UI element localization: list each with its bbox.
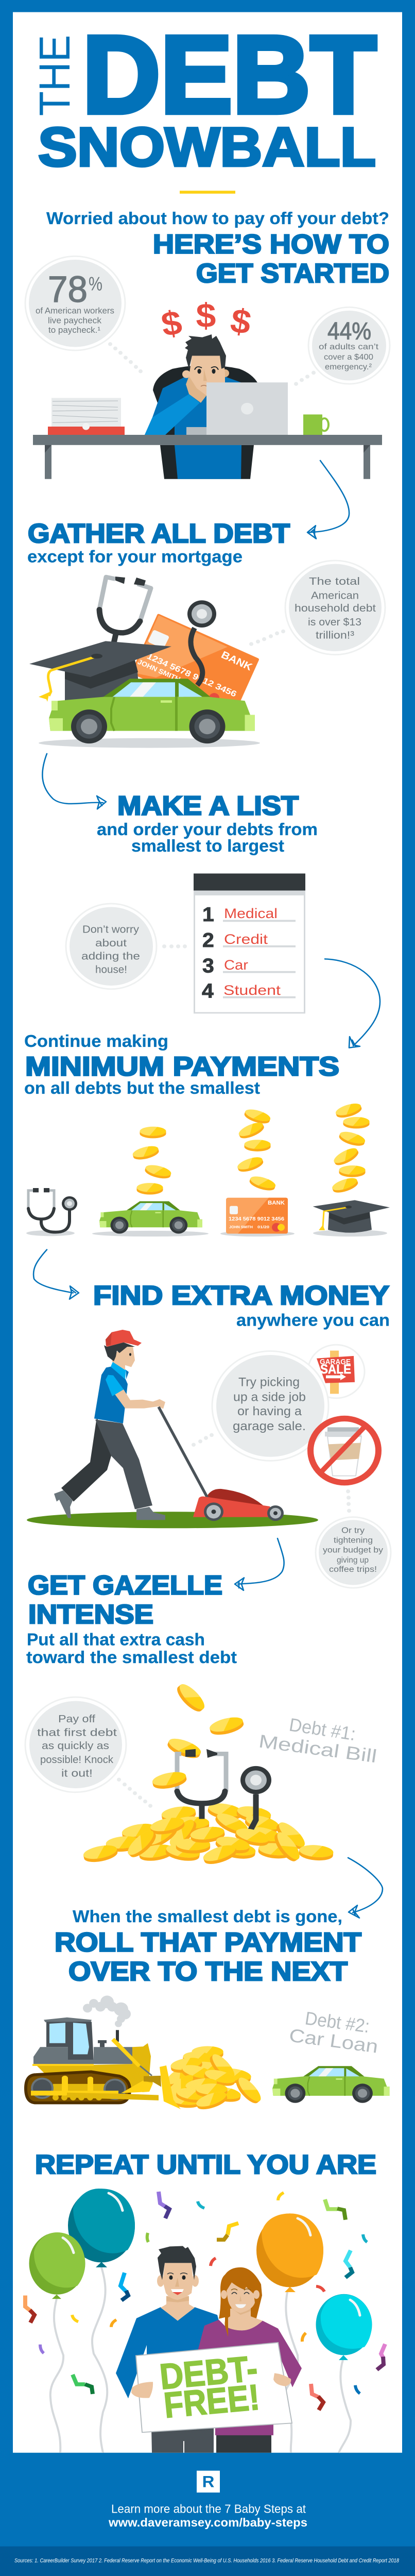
callout: first debt: as quickly as [42,1739,109,1752]
notepad: debt list: Student [223,982,281,998]
callout: 78%: to paycheck.¹ [48,325,100,335]
intro heading [46,209,389,289]
arrow: to roll that payment [348,1858,383,1918]
callout: 44%: of adults can’t [319,343,378,351]
footer: call to action: www.daveramsey.com/baby-steps [108,2516,307,2530]
footer: logo: R [202,2472,214,2490]
callout: coffee trips: your budget by [323,1546,384,1554]
dotted connector: coffee [346,1489,351,1513]
balloon: orange [256,2213,323,2292]
heading: minimum payments: MINIMUM PAYMENTS [25,1052,339,1081]
intro heading: GET STARTED [196,259,389,289]
callout: household debt: The total [309,575,360,587]
callout: household debt: trillion!³ [316,629,354,641]
heading: find extra money: FIND EXTRA MONEY [93,1281,389,1311]
dotted connector: 44% [294,371,316,386]
callout: house: Don’t worry [82,923,139,935]
falling coins: minimum payments [131,1100,372,1195]
heading: minimum payments: Continue making [24,1032,168,1051]
illustration: debt pile (stethoscope, card, cap, car): 1234 5678 9012 3456 [145,652,238,699]
callout: 44%: cover a $400 [324,352,373,362]
callout: first debt: it out! [61,1767,93,1779]
callout: side job [212,1351,328,1461]
heading: gather all debt: except for your mortgage [27,548,243,567]
dotted connector: house [162,944,187,948]
notepad: debt list: 1 [202,904,214,926]
balloon strings [50,2267,351,2453]
heading: gather all debt: GATHER ALL DEBT [28,519,290,549]
title: The Debt Snowball [31,13,376,178]
icon: small credit card: 01/20 [257,1225,269,1229]
icon: small stethoscope [26,1188,77,1236]
callout: coffee trips: Or try [341,1526,365,1535]
dotted connector: first debt [117,1777,152,1808]
notepad: debt list: Car [224,957,248,973]
handwritten label: debt 1: Debt #1: [288,1714,357,1744]
heading: get gazelle intense: Put all that extra cash [27,1630,205,1649]
callout: household debt: American [311,589,359,601]
notepad: debt list: 4 [202,980,214,1002]
icon: small credit card: JOHN SMITH [229,1225,253,1229]
intro heading: HERE’S HOW TO [153,230,389,259]
heading: get gazelle intense: GET GAZELLE [28,1571,222,1600]
footer: logo [197,2471,220,2493]
sign: debt-free: DEBT- [158,2348,260,2397]
illustration: debt-free couple [116,2246,302,2453]
icon: small credit card: BANK [268,1199,285,1206]
arrow: to get gazelle intense [235,1538,284,1590]
callout: first debt: Pay off [58,1713,95,1725]
illustration: worried man at desk [33,334,382,479]
heading: find extra money [93,1281,390,1330]
title: The Debt Snowball: SNOWBALL [38,117,376,178]
icon: red dollar signs: $ [228,301,254,342]
callout: coffee trips [316,1517,391,1588]
dotted connector: side job [192,1433,214,1447]
callout: house: adding the [81,950,140,962]
heading: make a list: and order your debts from [97,820,318,839]
callout: 78%: of American workers [36,306,114,315]
callout: house: house! [95,963,127,976]
icon: red dollar signs: $ [159,303,185,344]
icon: red dollar signs [159,297,254,344]
heading: roll that payment: OVER TO THE NEXT [68,1957,348,1987]
balloon: cyan [316,2294,372,2360]
illustration: bulldozer pushing coins [26,1995,267,2112]
sign: debt-free: FREE! [162,2377,262,2426]
callout: garage sale: SALE [320,1362,351,1377]
icon: green mug [303,414,328,435]
dotted connector: 78% [108,342,143,373]
illustration: debt pile (stethoscope, card, cap, car): BANK [219,650,254,673]
callout: 78%: live paycheck [48,315,101,325]
heading: roll that payment: When the smallest debt is gone, [73,1907,342,1926]
callout: 44%: emergency.² [325,362,372,371]
callout: first debt: that first debt [37,1726,117,1738]
callout: side job: garage sale. [233,1419,306,1433]
icon: small car [92,1201,209,1236]
illustration: debt pile (stethoscope, card, cap, car): JOHN SMITH [136,658,182,683]
callout: household debt [285,561,385,655]
confetti [25,2192,385,2410]
callout: 44% [308,307,390,384]
callout: first debt [25,1697,126,1792]
callout: garage sale [308,1345,365,1398]
heading: make a list: smallest to largest [131,837,284,856]
notepad: debt list: 3 [202,955,214,977]
footer: sources band [0,2547,415,2576]
dotted connector: household debt [249,630,285,646]
icon: small credit card [220,1198,295,1236]
callout: household debt: is over $13 [308,616,361,628]
footer: call to action: Learn more about the 7 Baby Steps at [111,2502,306,2516]
handwritten label: debt 2: Debt #2: [304,2008,371,2037]
callout: garage sale: GARAGE [320,1358,351,1366]
heading: roll that payment: ROLL THAT PAYMENT [55,1928,361,1957]
notepad: debt list: Credit [224,931,268,947]
heading: repeat until you are: REPEAT UNTIL YOU ARE [35,2150,376,2180]
illustration: man mowing lawn [27,1330,318,1528]
callout: house [66,904,157,989]
handwritten label: debt 1 [257,1714,378,1767]
icon: paper stack and red tray [48,398,125,435]
callout: side job: up a side job [233,1390,306,1404]
notepad: debt list: 2 [202,929,214,952]
heading: make a list [97,791,318,856]
heading: minimum payments [24,1032,339,1098]
callout: coffee trips: tightening [334,1536,373,1545]
yellow divider [180,191,235,194]
callout: 78%: % [89,273,102,295]
icon: red dollar signs: $ [196,297,216,334]
heading: roll that payment [55,1907,361,1987]
handwritten label: debt 2: Car Loan [288,2025,379,2057]
title: The Debt Snowball: DEBT [82,13,376,136]
illustration: medical bill in coin pile [82,1680,337,1867]
notepad: debt list: Medical [224,906,278,921]
heading: get gazelle intense: toward the smallest debt [26,1648,237,1667]
callout: 44%: 44% [327,318,371,345]
heading: gather all debt [27,519,290,567]
heading: get gazelle intense: INTENSE [28,1600,153,1630]
balloon: green [29,2232,85,2299]
arrow: down to gather all debt [307,461,349,539]
heading: minimum payments: on all debts but the smallest [24,1079,260,1098]
handwritten label: debt 2 [288,2008,379,2057]
icon: small credit card: 1234 5678 9012 3456 [229,1216,284,1222]
callout: first debt: possible! Knock [40,1754,113,1766]
illustration: debt pile (stethoscope, card, cap, car) [29,577,260,748]
callout: 78% [25,256,125,350]
arrow: to find extra money [33,1250,79,1299]
sign: debt-free [131,2343,292,2432]
arrow: to make a list [42,754,106,809]
callout: side job: Try picking [238,1375,300,1389]
heading: make a list: MAKE A LIST [117,791,299,821]
footer: call to action [108,2502,307,2530]
callout: household debt: household debt [295,602,376,614]
callout: coffee trips: coffee trips! [329,1565,377,1574]
arrow: to minimum payments [325,959,380,1048]
title: The Debt Snowball: THE [31,35,79,116]
notepad: debt list [194,874,305,1013]
icon: small graduation cap [313,1200,390,1236]
icon: car debt 2 [272,2066,390,2103]
intro heading: Worried about how to pay off your debt? [46,209,389,228]
heading: get gazelle intense [26,1571,237,1667]
callout: house: about [95,937,127,949]
balloon: teal [68,2189,135,2267]
icon: no coffee sign [310,1418,378,1483]
callout: side job: or having a [237,1404,302,1418]
callout: coffee trips: giving up [337,1556,369,1565]
callout: 78%: 78 [48,268,88,310]
heading: find extra money: anywhere you can [236,1311,390,1330]
handwritten label: debt 1: Medical Bill [257,1731,378,1767]
